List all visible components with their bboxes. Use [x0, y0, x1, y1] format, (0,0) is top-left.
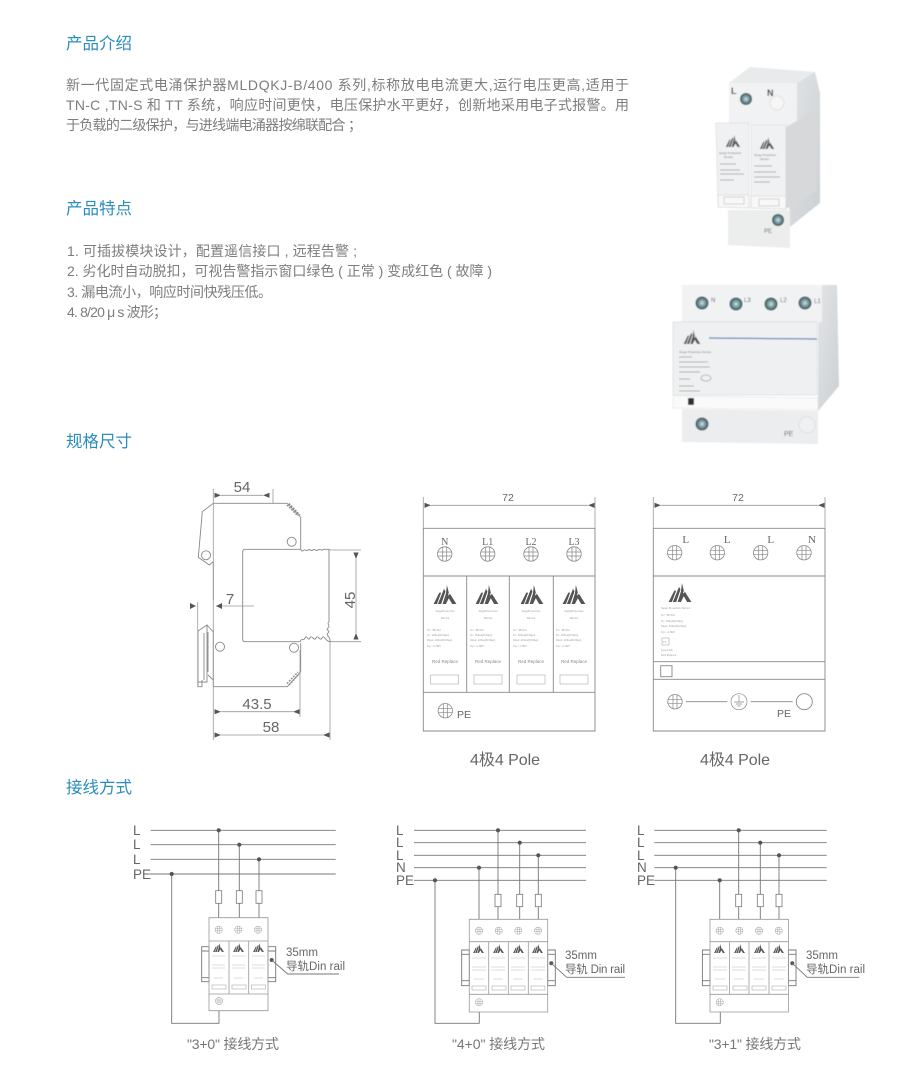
dimension 54: 54	[234, 479, 250, 496]
photo: two-pole surge protector: L	[731, 86, 737, 96]
connections and fuses	[170, 828, 262, 1023]
terminals	[668, 534, 816, 560]
callout: din rail: 导轨Din rail	[806, 962, 865, 976]
terminals: L2	[525, 537, 537, 548]
terminals	[438, 537, 581, 561]
text block: product features: 2. 劣化时自动脱扣，可视告警指示窗口绿色 ( 正常 ) 变成红色 ( 故障 )	[67, 263, 492, 279]
connections and fuses	[433, 828, 541, 1023]
bottom terminals and PE: PE	[777, 708, 791, 720]
terminals: L	[682, 534, 689, 546]
wiring diagram: 3+1	[637, 823, 865, 1023]
PE terminal	[438, 704, 471, 721]
heading: product introduction: 产品介绍	[66, 34, 132, 53]
photo: four-pole surge protector: L3	[744, 298, 751, 304]
terminals: L1	[482, 537, 493, 548]
module 2: SurgeProtective	[478, 609, 498, 613]
dimension 7	[190, 591, 254, 609]
terminals: L	[767, 534, 774, 546]
bus lines and labels: N	[396, 860, 406, 875]
module 1: Imax: 40KA(8/20μs)	[427, 638, 452, 642]
side profile outline	[198, 503, 330, 687]
module 4: In : 20KA(8/20μs)	[556, 633, 578, 637]
photo: two-pole surge protector	[716, 67, 820, 248]
caption: 3+0: "3+0" 接线方式	[187, 1036, 279, 1052]
photo: four-pole surge protector: Surge Protective Device	[679, 350, 712, 354]
device	[702, 919, 796, 1012]
photo: four-pole surge protector: N	[711, 298, 715, 304]
text block: product introduction: 新一代固定式电涌保护器MLDQKJ-B/400 系列,标称放电电流更大,运行电压更高,适用于	[66, 77, 629, 93]
photo: two-pole surge protector: Surge Protective	[719, 151, 742, 155]
bottom terminals and PE	[668, 694, 812, 720]
text block: product features: 3. 漏电流小，响应时间快残压低。	[67, 284, 272, 300]
bus lines and labels: N	[637, 860, 647, 875]
caption: 4 pole left: 4极4 Pole	[470, 751, 540, 769]
callout: din rail: 35mm	[806, 950, 838, 962]
dimension 72	[423, 492, 595, 528]
photo: four-pole surge protector: L2	[780, 298, 787, 304]
photo: two-pole surge protector: Surge Protective	[754, 153, 777, 157]
bus lines and labels: L	[133, 837, 141, 852]
terminals: L3	[568, 537, 580, 548]
module 1: Up: ≤1.8kV	[427, 644, 442, 648]
terminals: N	[441, 537, 448, 548]
module 3: Red Replace	[518, 659, 545, 664]
dimension 45: 45	[342, 592, 359, 608]
wiring diagram: 3+0	[133, 823, 345, 1023]
heading: dimensions: 规格尺寸	[66, 432, 132, 451]
module 3	[513, 585, 545, 684]
device outline	[653, 528, 825, 731]
module 1: Red Replace	[432, 659, 459, 664]
indicator window	[661, 666, 672, 677]
callout: din rail: 导轨Din rail	[286, 959, 345, 973]
module 2: Uc: 385Vac	[470, 628, 485, 632]
module 3: SurgeProtective	[521, 609, 541, 613]
diagram: side view with dimensions	[190, 479, 361, 740]
dimension 58: 58	[263, 719, 279, 736]
bus lines and labels: L	[637, 823, 645, 838]
label panel	[661, 583, 691, 657]
module 2	[470, 585, 502, 684]
module 1: SurgeProtective	[435, 609, 455, 613]
module 1	[427, 585, 459, 684]
callout: din rail: 35mm	[565, 950, 597, 962]
photo: four-pole surge protector: L1	[814, 299, 821, 305]
module 3: Device	[527, 616, 536, 620]
module 1: Device	[441, 616, 450, 620]
connections and fuses	[674, 828, 782, 1023]
dimension 72: 72	[732, 492, 744, 504]
module 1: In : 20KA(8/20μs)	[427, 633, 449, 637]
caption: 3+1: "3+1" 接线方式	[709, 1036, 801, 1052]
terminals: N	[808, 534, 816, 546]
callout: din rail	[790, 950, 865, 977]
photo: two-pole surge protector: Device	[760, 157, 770, 161]
photo: four-pole surge protector: PE	[784, 431, 794, 438]
PE terminal: PE	[457, 709, 471, 721]
bus lines and labels	[133, 823, 336, 882]
dimension 72	[653, 492, 825, 528]
caption: 4+0: "4+0" 接线方式	[452, 1036, 545, 1052]
device outline	[423, 528, 595, 731]
module 2: Red Replace	[475, 659, 502, 664]
dimension 58	[221, 719, 323, 736]
module 2: Device	[484, 616, 493, 620]
heading: wiring methods: 接线方式	[66, 778, 132, 797]
bus lines and labels: L	[396, 848, 404, 863]
text block: product introduction	[66, 77, 629, 134]
bus lines and labels: L	[637, 848, 645, 863]
module 2: Imax: 40KA(8/20μs)	[470, 638, 495, 642]
bus lines and labels: L	[396, 835, 404, 850]
dimension 43.5	[221, 696, 293, 713]
caption: 4 pole right: 4极4 Pole	[700, 751, 770, 769]
bus lines and labels	[637, 823, 827, 888]
text block: product features: 4. 8/20 μ s 波形；	[67, 304, 167, 321]
text block: product introduction: TN-C ,TN-S 和 TT 系统，响应时间更快，电压保护水平更好，创新地采用电子式报警。用	[66, 97, 629, 113]
label panel: Green Ok	[661, 648, 673, 652]
label panel: Uc: 385Vac	[661, 613, 676, 617]
module 4: Up: ≤1.8kV	[556, 644, 571, 648]
wiring diagram: 4+0	[396, 823, 625, 1023]
dimension 7: 7	[226, 591, 234, 608]
photo: two-pole surge protector: PE	[764, 229, 772, 235]
dimension 43.5: 43.5	[242, 696, 272, 713]
module 4: SurgeProtective	[564, 609, 584, 613]
bus lines and labels: L	[396, 823, 404, 838]
dimension 45	[342, 559, 359, 633]
bus lines and labels	[396, 823, 586, 888]
extension lines	[198, 489, 361, 740]
text block: product introduction: 于负载的二级保护，与进线端电涌器按绵联配合 ；	[66, 117, 362, 134]
dimension 72: 72	[502, 492, 514, 504]
dimension 54	[221, 479, 263, 496]
bus lines and labels: PE	[637, 873, 655, 888]
callout: din rail: 35mm	[286, 947, 318, 959]
photo: two-pole surge protector: Device	[724, 155, 734, 159]
bus lines and labels: L	[133, 823, 141, 838]
callout: din rail: 导轨 Din rail	[565, 962, 625, 976]
heading: product features: 产品特点	[66, 199, 132, 218]
module 4: Red Replace	[561, 659, 588, 664]
diagram: front view, 4 pole modules	[423, 492, 595, 731]
module 2: Up: ≤1.8kV	[470, 644, 485, 648]
callout: din rail	[270, 947, 345, 974]
module 4: Device	[570, 616, 579, 620]
bus lines and labels: L	[133, 852, 141, 867]
label panel: In : 20KA(8/20μs)	[661, 619, 683, 623]
text block: product features	[67, 243, 492, 321]
module 3: Imax: 40KA(8/20μs)	[513, 638, 538, 642]
callout: din rail	[549, 950, 625, 977]
photo: two-pole surge protector: N	[767, 88, 774, 98]
module 3: In : 20KA(8/20μs)	[513, 633, 535, 637]
label panel: Imax: 40KA(8/20μs)	[661, 624, 686, 628]
module 4: Imax: 40KA(8/20μs)	[556, 638, 581, 642]
module 2: In : 20KA(8/20μs)	[470, 633, 492, 637]
module 4	[556, 585, 588, 684]
device	[462, 919, 555, 1012]
label panel: Up: ≤1.8kV	[661, 630, 676, 634]
label panel: Red Replace	[661, 653, 677, 657]
terminals: L	[724, 534, 731, 546]
photo: four-pole surge protector	[673, 285, 839, 444]
device	[202, 918, 276, 1011]
label panel: T2	[663, 640, 667, 644]
bus lines and labels: PE	[396, 873, 414, 888]
module 1: Uc: 385Vac	[427, 628, 442, 632]
label panel: Surge Protective Device	[661, 606, 691, 610]
module 3: Up: ≤1.8kV	[513, 644, 528, 648]
bus lines and labels: PE	[133, 867, 151, 882]
bus lines and labels: L	[637, 835, 645, 850]
module 3: Uc: 385Vac	[513, 628, 528, 632]
module 4: Uc: 385Vac	[556, 628, 571, 632]
text block: product features: 1. 可插拔模块设计，配置遥信接口 , 远程告警 ;	[67, 243, 357, 259]
diagram: front view, 4 pole single panel	[653, 492, 825, 731]
